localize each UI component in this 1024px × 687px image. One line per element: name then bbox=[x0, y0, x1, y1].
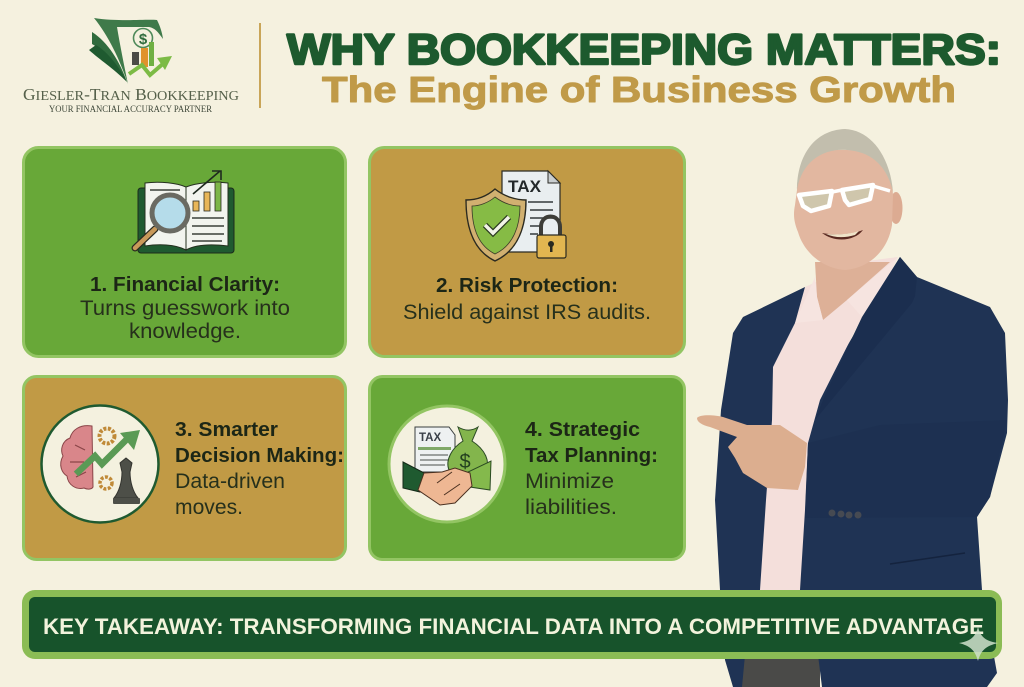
panel: strategic tax planning: Tax Planning: bbox=[525, 445, 658, 467]
heading: 4. Strategic bbox=[525, 419, 640, 441]
icon: sparkle watermark bbox=[959, 627, 998, 661]
heading: 3. Smarter bbox=[175, 419, 278, 441]
head bbox=[794, 150, 893, 270]
body text: Data-driven bbox=[175, 470, 285, 493]
sleeve bbox=[805, 420, 1007, 518]
ear bbox=[890, 192, 902, 224]
panel: financial clarity bbox=[24, 148, 346, 356]
icon: book with magnifier bbox=[135, 171, 234, 253]
banner text: KEY TAKEAWAY: TRANSFORMING FINANCIAL DATA INTO A COMPETITIVE ADVANTAGE bbox=[43, 614, 984, 639]
panel: smarter decision making bbox=[24, 376, 346, 560]
subtitle: The Engine of Business Growth bbox=[322, 69, 956, 110]
jacket bbox=[715, 257, 1008, 687]
logo icon: $ bbox=[139, 31, 148, 48]
logo icon bbox=[89, 18, 172, 84]
cuff buttons bbox=[828, 510, 862, 518]
icon: shield and tax document: TAX bbox=[508, 177, 542, 196]
icon: tax form, money bag and handshake bbox=[389, 406, 505, 522]
panel: financial clarity: knowledge. bbox=[129, 320, 241, 343]
glasses bbox=[799, 185, 890, 211]
panel: strategic tax planning bbox=[370, 376, 684, 560]
heading: 1. Financial Clarity: bbox=[90, 274, 280, 296]
panel: smarter decision making: Decision Making: bbox=[175, 445, 344, 467]
trousers bbox=[742, 655, 820, 687]
smile bbox=[822, 230, 863, 239]
heading: 2. Risk Protection: bbox=[436, 275, 618, 297]
shirt bbox=[760, 257, 898, 590]
icon: tax form, money bag and handshake: $ bbox=[459, 451, 471, 473]
lapel bbox=[815, 257, 917, 420]
logo bbox=[23, 18, 239, 115]
hair bbox=[797, 129, 893, 192]
title: WHY BOOKKEEPING MATTERS: bbox=[287, 26, 1001, 74]
logo tagline: YOUR FINANCIAL ACCURACY PARTNER bbox=[49, 105, 213, 115]
header divider bbox=[259, 23, 261, 108]
collar bbox=[795, 257, 898, 323]
panel: risk protection bbox=[370, 148, 684, 356]
panel: smarter decision making: moves. bbox=[175, 496, 243, 519]
body text: Turns guesswork into bbox=[80, 297, 290, 320]
icon: shield and tax document bbox=[466, 171, 566, 261]
icon: brain, growth arrow and chess piece bbox=[42, 406, 158, 522]
neck bbox=[815, 262, 890, 320]
person pointing bbox=[697, 129, 1008, 687]
body text: Minimize bbox=[525, 470, 614, 493]
key takeaway banner bbox=[22, 590, 1002, 659]
hand bbox=[697, 415, 807, 490]
body text: Shield against IRS audits. bbox=[403, 301, 651, 324]
panel: strategic tax planning: liabilities. bbox=[525, 496, 617, 519]
pocket bbox=[890, 553, 965, 564]
icon: tax form, money bag and handshake: TAX bbox=[419, 432, 441, 444]
logo name: GIESLER-TRAN BOOKKEEPING bbox=[23, 85, 239, 104]
